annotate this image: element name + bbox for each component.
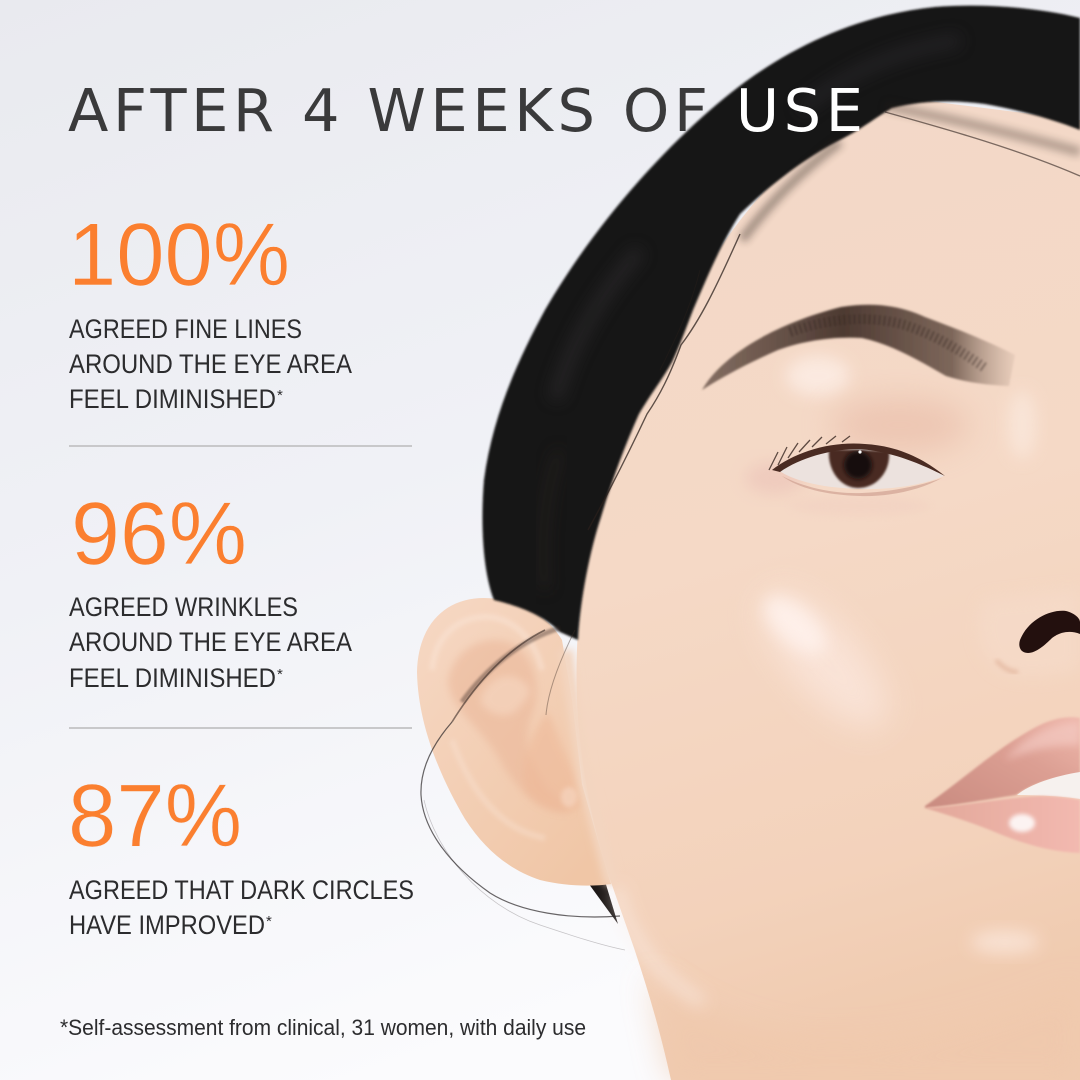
description: AGREED FINE LINES [69, 314, 302, 344]
description [69, 592, 352, 693]
description: AROUND THE EYE AREA [69, 349, 352, 379]
hair strands across ear [452, 628, 575, 722]
hair: main mass [482, 6, 1080, 640]
eyebrow [702, 305, 1015, 390]
description: AGREED THAT DARK CIRCLES [69, 875, 414, 905]
nose [979, 590, 1080, 676]
neck shade [650, 975, 1080, 1080]
jaw highlight [617, 888, 703, 1003]
stat: 87% [68, 765, 414, 940]
eye [769, 436, 945, 496]
number: 87% [68, 765, 242, 865]
description: * [266, 913, 272, 930]
description [69, 314, 352, 414]
brow bone highlights [786, 356, 850, 396]
skin: face and neck [576, 95, 1080, 1080]
description: HAVE IMPROVED [69, 910, 265, 940]
description: FEEL DIMINISHED [69, 663, 276, 693]
stat: 100% [68, 204, 352, 414]
hairline wisps [588, 106, 1080, 530]
hair sheen [543, 40, 960, 590]
long stray hair [421, 722, 625, 950]
description: FEEL DIMINISHED [69, 384, 276, 414]
description [69, 875, 414, 940]
eye shadow [745, 397, 970, 516]
chin highlight [971, 930, 1039, 954]
stat: 96% [69, 483, 352, 693]
title: AFTER 4 WEEKS OF USE [68, 76, 863, 145]
hair wedge below ear [586, 878, 618, 924]
number: 100% [68, 204, 290, 304]
description: AGREED WRINKLES [69, 592, 298, 622]
portrait photo [417, 6, 1080, 1080]
footnote: *Self-assessment from clinical, 31 women, with daily use [60, 1015, 586, 1040]
cheek highlight [743, 574, 907, 746]
lips [925, 717, 1080, 853]
ear to face blend [566, 650, 612, 884]
number: 96% [71, 483, 247, 583]
description: AROUND THE EYE AREA [69, 627, 352, 657]
ear [417, 598, 612, 886]
description: * [277, 666, 283, 683]
description: * [277, 387, 283, 404]
